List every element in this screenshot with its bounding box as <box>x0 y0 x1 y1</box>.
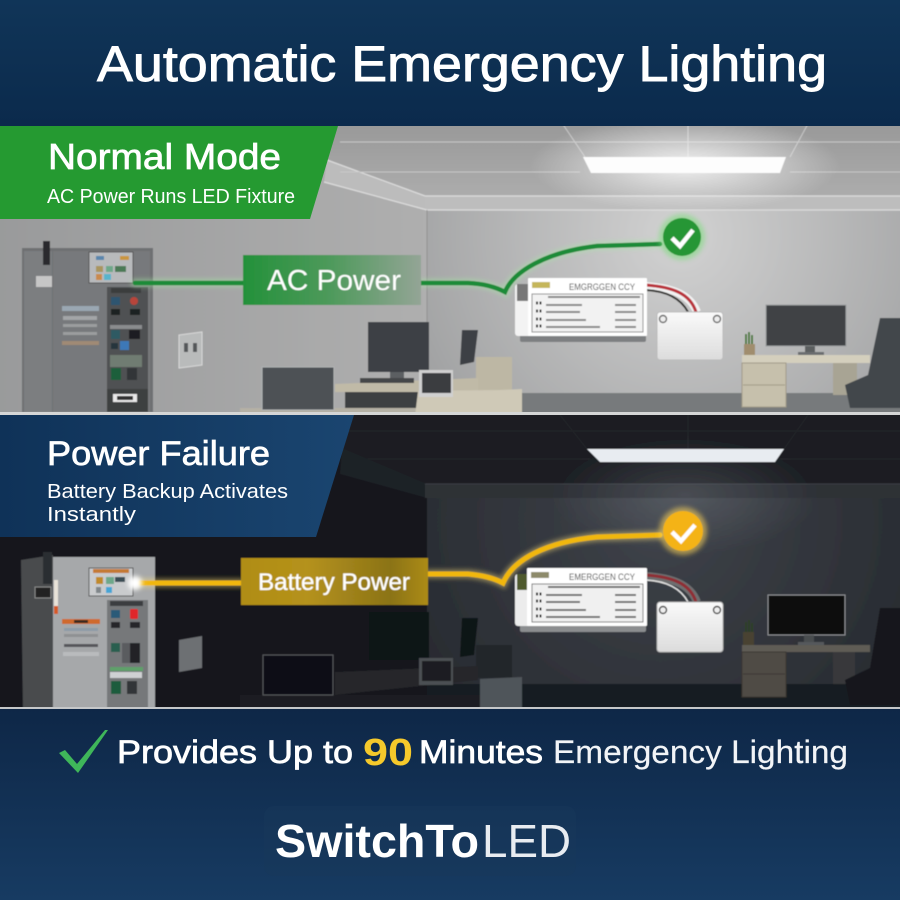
subheading: battery backup: Battery Backup Activates <box>47 481 288 503</box>
side wall beam <box>340 448 427 498</box>
dark background <box>0 414 900 713</box>
left office silhouettes <box>240 612 522 713</box>
footer background <box>0 709 900 900</box>
heading: Normal Mode: Normal Mode <box>48 136 281 177</box>
battery pack <box>657 602 723 652</box>
ceiling light glow <box>530 117 840 213</box>
left office desks and monitors <box>240 322 522 416</box>
driver wires <box>646 286 697 312</box>
icon: green check badge <box>659 214 705 260</box>
side wall beam <box>324 160 427 210</box>
divider above footer <box>0 707 900 709</box>
panel: normal mode office scene <box>0 117 900 416</box>
subheading: AC power: AC Power Runs LED Fixture <box>47 186 295 208</box>
ceiling LED fixture <box>587 449 784 462</box>
emergency duration statement: Provides Up to <box>117 734 353 770</box>
emergency driver module: EMERGGEN CCY <box>569 572 636 583</box>
right office desk <box>742 305 900 408</box>
emergency duration statement: 90 <box>363 732 413 774</box>
label: Battery Power <box>241 558 428 605</box>
label: Battery Power: Battery Power <box>258 569 410 596</box>
wall beam <box>425 484 900 498</box>
connector: battery power line <box>140 535 660 583</box>
label: AC Power: AC Power <box>267 265 401 297</box>
emergency duration statement: Minutes <box>419 734 543 770</box>
ceiling tile lines <box>345 415 900 459</box>
emergency duration statement: Emergency Lighting <box>553 734 848 770</box>
emergency driver module <box>515 278 697 342</box>
emergency duration statement <box>117 732 848 774</box>
logo: SwitchToLED: LED <box>482 815 571 867</box>
subheading: battery backup: Instantly <box>47 504 136 526</box>
title: Automatic Emergency Lighting <box>97 36 827 92</box>
driver wires <box>646 576 697 602</box>
floor <box>427 684 900 713</box>
emergency driver module <box>515 568 697 632</box>
back wall <box>427 498 900 684</box>
logo: SwitchToLED: SwitchTo <box>275 815 479 867</box>
divider between scenes <box>0 412 900 415</box>
wall access plate <box>179 636 202 672</box>
floor <box>427 393 900 416</box>
back wall <box>427 209 900 394</box>
glow at panel connection <box>128 576 142 590</box>
icon: green tick <box>59 730 108 773</box>
logo: SwitchToLED <box>275 815 571 867</box>
left wall <box>0 120 428 416</box>
wall beam <box>425 196 900 210</box>
panel: Normal Mode heading banner <box>0 126 338 219</box>
header background band <box>0 0 900 126</box>
ceiling LED fixture <box>583 157 786 173</box>
connector: AC power line <box>135 244 660 292</box>
logo backdrop <box>264 806 576 876</box>
ceiling light glow <box>550 435 820 555</box>
panel: power failure office scene <box>0 414 900 713</box>
label: AC Power <box>243 255 421 305</box>
emergency driver module: EMGRGGEN CCY <box>569 282 636 293</box>
ceiling tile lines <box>340 120 900 172</box>
wall outlet plate <box>179 332 202 368</box>
electrical panel <box>22 241 153 412</box>
battery pack <box>657 312 723 360</box>
ceiling <box>0 120 900 210</box>
electrical panel <box>21 552 155 713</box>
heading: Power Failure: Power Failure <box>47 435 270 473</box>
icon: amber check badge <box>659 507 707 555</box>
panel: Power Failure heading banner <box>0 415 354 537</box>
right office desk <box>742 595 900 705</box>
dark ceiling <box>340 414 900 487</box>
